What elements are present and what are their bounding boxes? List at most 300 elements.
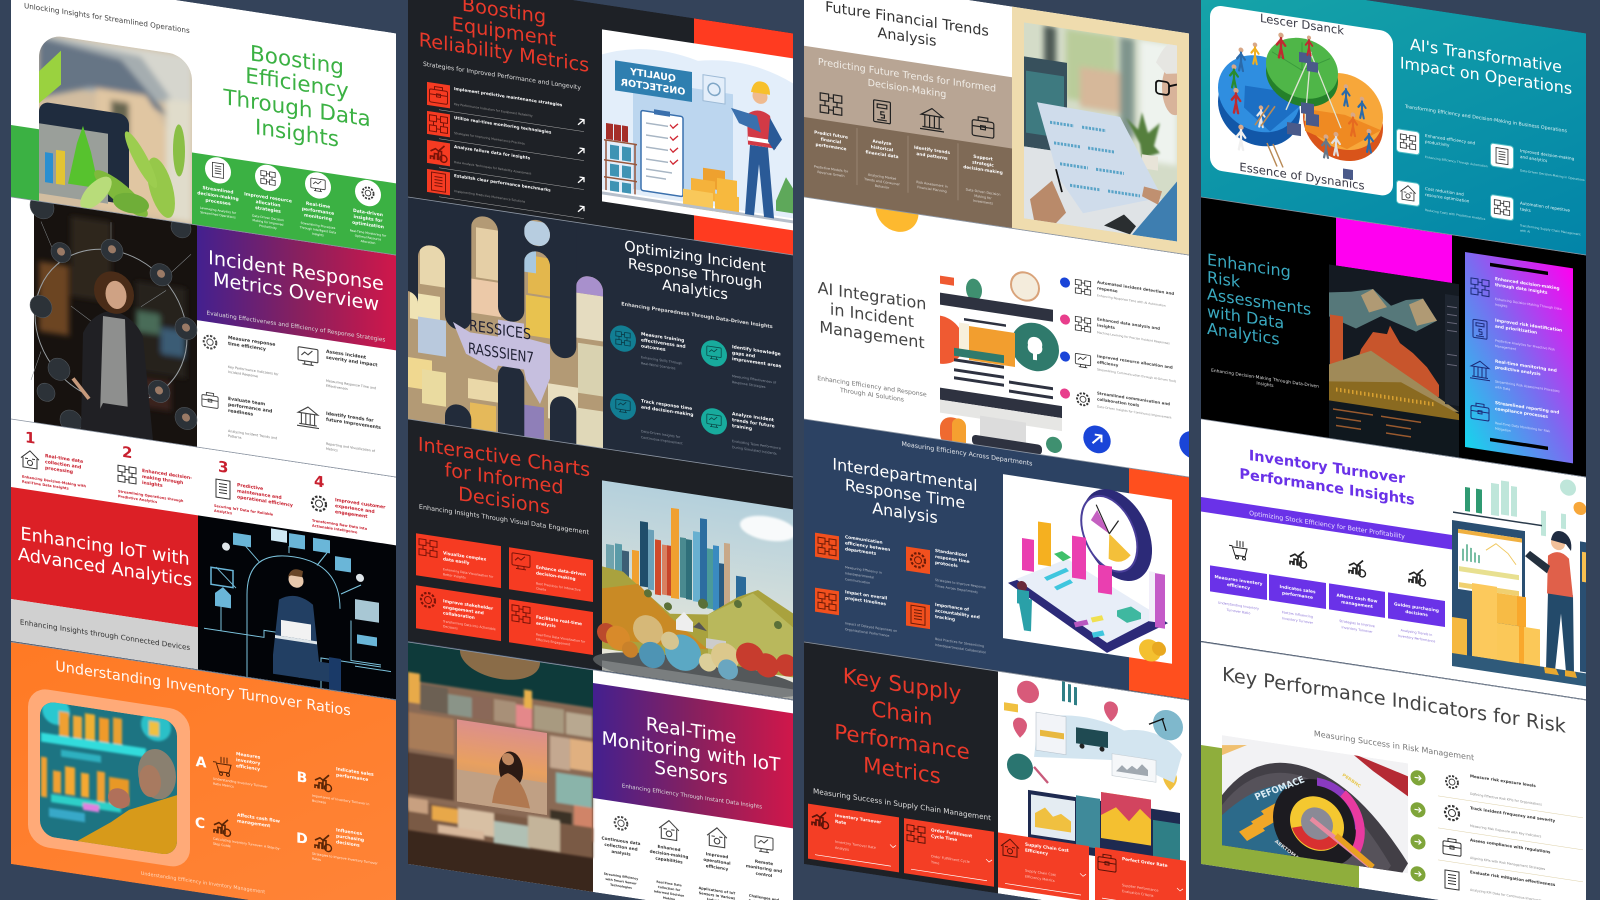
image caption top: Lescer Dsanck <box>1260 11 1344 38</box>
item: monitoring: Real-time monitoring and <box>1495 359 1557 374</box>
item: readiness: performance and <box>228 402 272 415</box>
item C: Step Guide <box>213 842 231 848</box>
item: timelines: project timelines <box>845 595 886 607</box>
item: risk identification: Predictive Analytics for Proactive Risk <box>1495 339 1555 352</box>
card: inventory turnover: Rate <box>835 819 846 826</box>
item: accountability: Importance of <box>935 602 969 613</box>
title <box>419 0 589 77</box>
item: automation: tasks <box>1520 206 1531 213</box>
title: Real-Time <box>646 714 736 749</box>
item: reporting: Mitigation <box>1495 427 1511 433</box>
item: readiness: readiness <box>228 408 253 418</box>
item: readiness <box>202 392 277 445</box>
title: with Data <box>1207 302 1284 333</box>
item: cash flow: management <box>1341 599 1373 610</box>
item: monitoring: with Data <box>1495 385 1510 391</box>
item: historical data <box>863 98 900 192</box>
item: communication: departments <box>845 546 877 557</box>
item: predictive maintenance: Key Performance Indicators for Equipment Reliability <box>454 102 533 118</box>
title: Response Through <box>628 255 762 293</box>
item: decision-making: Enhanced <box>658 844 680 852</box>
item: efficiency: productivity <box>1425 139 1450 148</box>
card: real-time <box>509 599 593 655</box>
item: response time: Continuous Improvement <box>641 435 683 446</box>
item: compliance <box>1410 828 1583 882</box>
item: frequency: Measuring Risk Exposure with Key Indicators <box>1470 824 1542 839</box>
sign with mirrored lettering <box>615 60 692 102</box>
item: purchasing: Guides purchasing <box>1394 601 1439 614</box>
item: data collection: collection and <box>604 842 638 852</box>
card: visualize data: Better Insights <box>443 572 466 580</box>
item: performance monitoring: performance <box>302 206 334 217</box>
item: trends: and patterns <box>916 151 948 162</box>
item: operational efficiency: Improved <box>706 851 728 860</box>
subtitle: Insights <box>1256 380 1274 389</box>
item: reporting: Real-Time Data Monitoring for Risk <box>1495 421 1550 433</box>
item: performance monitoring: monitoring <box>304 212 332 223</box>
item 1: real-time data: Real-Time Data Insights <box>22 480 69 491</box>
item: response time: time efficiency <box>228 341 266 353</box>
item: knowledge gaps: Response Strategies <box>732 380 766 389</box>
item: historical data: Analyzing Market <box>868 173 897 181</box>
item: predict performance: Revenue Growth <box>817 170 845 178</box>
subtitle band <box>1201 497 1452 550</box>
title: Chain <box>871 697 933 731</box>
subtitle: Enhancing Insights Through Visual Data Engagement <box>419 503 590 536</box>
item: resources: efficiency <box>1097 359 1119 368</box>
card: order fulfillment: Time <box>930 860 939 865</box>
subtitle: Through AI Solutions <box>839 387 904 404</box>
item: reporting: Streamlined reporting and <box>1495 400 1559 416</box>
item: timelines: Impact of Delayed Responses on <box>845 621 897 633</box>
card: real-time: analysis <box>536 620 556 629</box>
title: Incident Response <box>208 246 384 295</box>
item: predict performance: performance <box>816 142 847 152</box>
card: supply chain cost: Supply Chain Cost <box>1025 868 1057 877</box>
item: risk identification: Improved risk identification <box>1495 318 1562 334</box>
footer text: Understanding Efficiency in Inventory Management <box>141 871 265 896</box>
item: sales: Indicates sales <box>1279 584 1316 595</box>
subtitle: Predicting Future Trends for Informed <box>818 57 996 95</box>
title: Assessments <box>1207 284 1311 319</box>
item 4: customer experience: engagement <box>335 509 368 520</box>
item: monitoring <box>427 111 584 161</box>
item: remote monitoring: Remote <box>755 859 773 866</box>
title: Key Supply <box>843 664 962 707</box>
item D <box>297 828 378 864</box>
item: communication: Communication <box>845 534 883 546</box>
item: trends: future improvements <box>326 417 381 431</box>
item: historical data: Behavior <box>875 184 890 190</box>
item: exposure: Measure risk exposure levels <box>1470 773 1536 788</box>
item: streamlined decision-making: Streamlined <box>203 185 233 196</box>
panel: Key Performance Indicators <box>1201 642 1586 900</box>
panel: Enhancing Risk Assessments <box>1201 197 1586 477</box>
gradient panel <box>1465 252 1573 463</box>
item: automation: Transforming Supply Chain Management <box>1519 223 1581 237</box>
item: response time: Measure response <box>228 335 275 348</box>
item: compliance: Assess compliance with regulations <box>1470 837 1551 855</box>
title block <box>11 487 198 627</box>
item A: inventory <box>236 757 260 767</box>
item: predict performance <box>814 92 849 179</box>
image card: 3D pie with people <box>1210 3 1393 197</box>
item: training <box>610 324 686 372</box>
item: historical data: Analyze <box>873 138 892 147</box>
item: data collection <box>602 814 641 891</box>
panel: Understanding Inventory Turnover <box>11 642 396 900</box>
card: stakeholders: Transforming Data into Actionable <box>442 619 496 631</box>
item: decision-making: and analytics <box>1520 154 1547 163</box>
photo: collage of beach pictures <box>408 621 593 892</box>
title: Response Time <box>845 475 965 512</box>
subtitle: Enhancing Efficiency Through Instant Data Insights <box>622 783 762 811</box>
item A: Understanding Inventory Turnover <box>213 777 268 789</box>
item: detection: Enhancing Response Time with AI Automation <box>1097 293 1166 308</box>
title: Interdepartmental <box>832 454 978 495</box>
item: cash flow: Strategies to Improve <box>1339 619 1375 628</box>
item: mitigation: Evaluate risk mitigation effectiveness <box>1470 869 1556 887</box>
item: performance monitoring: Through Intelligent Data <box>299 225 336 235</box>
item: decision-making <box>650 818 688 900</box>
item C: Calculating Inventory Turnover: A Step-by- <box>213 837 281 851</box>
item: data-driven insights: optimization <box>352 220 384 230</box>
item: streamlined decision-making: decision-making <box>197 190 239 202</box>
item: strategic decisions <box>963 115 1003 207</box>
item: severity: Assess incident <box>326 349 367 361</box>
illustration: dashboard computer <box>940 260 1062 464</box>
title: Insights <box>255 115 339 153</box>
item D: D <box>296 830 308 848</box>
item: resource allocation <box>244 161 292 233</box>
item: risk identification: and prioritization <box>1495 324 1537 336</box>
card: stakeholders: Decisions <box>443 624 458 631</box>
item: monitoring: Streamlining Risk Assessment Processes <box>1495 380 1560 393</box>
green accent block <box>1201 745 1359 888</box>
title: for Informed <box>444 458 564 499</box>
item: trends: During Simulated Incidents <box>732 445 777 456</box>
image caption bottom: Essence of Dysnanics <box>1239 160 1365 193</box>
item: readiness: Analyzing Incident Trends and <box>228 429 277 440</box>
item: trends: Metrics <box>326 447 338 453</box>
item: knowledge gaps: Measuring Effectiveness of <box>732 374 777 385</box>
item: decision-making <box>1471 272 1562 317</box>
panel: Inventory Turnover Performance <box>1201 419 1586 699</box>
item: trends: trends for future <box>732 417 775 430</box>
item: resources: Streamlining Communication through AI-Driven Tools <box>1097 367 1177 383</box>
card: visualize data: Visualize complex <box>443 550 486 563</box>
item: accountability: accountability and <box>935 608 980 621</box>
item: operational efficiency <box>699 825 736 900</box>
title: Decisions <box>458 482 550 519</box>
item: efficiency <box>1396 129 1488 168</box>
card: visualize data: Enhancing Data Visualization for <box>443 567 494 579</box>
photo: house and dashboard <box>39 33 192 231</box>
item: decision-making: decision-making <box>650 849 688 859</box>
title <box>1239 446 1415 509</box>
item: decision-making: Informed Decision <box>654 889 684 898</box>
item: trends <box>296 406 381 452</box>
item: readiness: Evaluate team <box>228 396 265 408</box>
title <box>418 433 590 525</box>
item: performance monitoring: Real-time <box>306 201 330 210</box>
item 3: predictive maintenance: maintenance and <box>237 488 282 501</box>
item: response time <box>202 334 278 378</box>
item 2: decision-making: 2 <box>122 443 132 462</box>
item: resources <box>1060 348 1177 383</box>
item: data analysis: insights <box>1097 322 1116 330</box>
subtitle: Transforming Efficiency and Decision-Making in Business Operations <box>1404 104 1567 135</box>
photo: sticky notes wall behind pill cut-outs: RESSICES <box>469 316 531 344</box>
item D: Rates <box>312 857 321 862</box>
item: decision-making: Enhancing Decision-Making Through Data <box>1495 297 1562 311</box>
item: severity: Effectiveness <box>326 384 348 391</box>
kicker: Measuring Efficiency Across Departments <box>902 441 1032 468</box>
panel: Future Financial Trends <box>804 0 1189 255</box>
illustration: person with connected devices <box>198 515 396 699</box>
item 3: predictive maintenance: operational efficiency <box>237 494 293 509</box>
item 3: predictive maintenance: Predictive <box>237 482 263 492</box>
photo: sticky notes wall behind pill cut-outs <box>408 167 604 477</box>
card: order fulfillment: Order Fulfillment Cycle <box>931 854 970 864</box>
card: supply chain cost <box>998 832 1089 900</box>
item: historical data: Trends and Consumer <box>863 177 900 187</box>
card: supply chain cost: Supply Chain Cost <box>1025 842 1069 854</box>
item: cash flow: Inventory Turnover <box>1342 625 1373 634</box>
item D: Strategies to Improve Inventory Turnover <box>312 852 378 866</box>
item: data analysis: Enhanced data analysis and <box>1097 316 1160 331</box>
subtitle band: Optimizing Stock Efficiency for Better Profitability <box>1249 510 1405 541</box>
panel: Boosting Equipment Reliability <box>408 0 793 255</box>
subtitle: Enhancing Preparedness Through Data-Driven Insights <box>621 301 773 330</box>
title block: Advanced Analytics <box>18 544 192 591</box>
item: data collection: Streaming Efficiency <box>604 872 638 881</box>
item: streamlined decision-making: Streamlined Operations <box>200 210 236 220</box>
item: operational efficiency: efficiency <box>706 863 728 872</box>
image: terrain and data dashboard <box>1329 264 1459 458</box>
item A: Ratio Metrics <box>213 782 234 789</box>
item: response time: and decision-making <box>641 404 693 418</box>
title block: Enhancing IoT with <box>20 524 190 570</box>
item: purchasing: Inventory Performance <box>1398 634 1435 643</box>
item: operational efficiency: Applications of IoT <box>699 886 736 896</box>
title: Future Financial Trends <box>825 0 989 40</box>
item 2: decision-making <box>118 446 192 504</box>
card: stakeholders: Improve stakeholder <box>443 598 494 612</box>
item B: Importance of Inventory Turnover in <box>312 794 369 806</box>
illustration: woman with boxes and clipboard <box>1452 462 1586 686</box>
image: performance gauge: PEFOMACE <box>1253 775 1307 803</box>
item: trends: Reporting and Visualization of <box>326 442 376 453</box>
title: Analysis <box>878 25 936 50</box>
card: real-time: Facilitate real-time <box>536 614 582 627</box>
item: strategic decisions: Investments <box>973 199 993 206</box>
title: Monitoring with IoT <box>602 728 781 776</box>
subtitle: Measuring Success in Supply Chain Management <box>813 786 991 822</box>
item: data analysis <box>1060 311 1170 345</box>
subtitle: Strategies for Improved Performance and Longevity <box>423 61 581 92</box>
item: purchasing: decisions <box>1405 609 1428 618</box>
title: Reliability Metrics <box>419 28 589 77</box>
item: predictive maintenance: Implement predictive maintenance strategies <box>454 86 563 107</box>
item D: Influences <box>336 827 362 837</box>
item: accountability: Best Practices for Streamlining <box>935 637 984 648</box>
subtitle: Enhancing Decision-Making Through Data-Driven <box>1211 368 1319 390</box>
item: cost reduction: resource optimization <box>1425 192 1470 204</box>
item 4: customer experience: Transforming Raw Data into <box>312 519 368 531</box>
item: trends: Identify trends <box>914 145 950 156</box>
item: decision-making <box>1490 143 1585 182</box>
title: Performance <box>834 720 970 765</box>
title: Sensors <box>654 757 728 789</box>
item: cost reduction: Reducing Costs with Predictive Analytics <box>1425 208 1486 221</box>
card: decision-making <box>509 547 593 602</box>
sign with mirrored lettering: QUALITY <box>630 67 676 85</box>
item C: management <box>237 818 271 829</box>
item: protocols <box>906 543 986 596</box>
item: remote monitoring: monitoring and <box>746 863 782 874</box>
item: trends: training <box>732 423 752 432</box>
item D: decisions <box>336 839 360 849</box>
item: monitoring: predictive analysis <box>1495 365 1541 377</box>
subtitle block <box>11 599 198 669</box>
item: severity: Measuring Response Time and <box>326 379 376 390</box>
item: sales: performance <box>1282 590 1313 601</box>
item: failure data <box>427 140 584 190</box>
item: risk identification <box>1473 314 1562 358</box>
item: severity: severity and impact <box>326 355 378 369</box>
title: Understanding Inventory Turnover Ratios <box>55 659 351 719</box>
item: protocols: protocols <box>935 560 958 569</box>
title: AI's Transformative <box>1410 35 1562 77</box>
item: strategic decisions: Making for <box>974 194 992 201</box>
item A: A <box>196 754 207 772</box>
item: response time: Key Performance Indicators for <box>228 365 279 377</box>
item: training: effectiveness and <box>641 337 686 350</box>
item: decision-making: Enhanced decision-making <box>1495 276 1560 292</box>
item 1: real-time data: collection and <box>45 459 81 471</box>
item: efficiency <box>1210 536 1267 618</box>
item: training: Measure training <box>641 331 684 344</box>
item: performance monitoring: Streamlining Processes <box>301 221 336 230</box>
card: order fulfillment: Order Fulfillment <box>931 827 972 839</box>
title: Equipment <box>452 12 557 51</box>
item: trends: Identify trends for <box>326 411 374 424</box>
item: benchmarks: Implementing Predictive Maintenance Solutions <box>454 189 526 204</box>
image: performance gauge <box>1222 733 1408 883</box>
item 1: real-time data <box>20 432 86 490</box>
item: strategic decisions: Data-Driven Decision <box>966 187 1000 197</box>
item: detection <box>1060 274 1174 309</box>
item 2: decision-making: Predictive Analytics <box>118 494 157 504</box>
card: supply chain cost: Efficiency <box>1025 848 1048 857</box>
header band <box>197 225 396 350</box>
item: resource allocation: Productivity <box>259 224 277 230</box>
item B: performance <box>336 772 368 783</box>
item: failure data: Analyze failure data for insights <box>454 144 531 161</box>
title: Analytics <box>662 277 728 303</box>
item 2: decision-making: Enhanced decision- <box>142 468 192 481</box>
item: communication <box>1060 385 1172 420</box>
item 2: decision-making: insights <box>142 480 163 489</box>
card: decision-making: Charts <box>536 586 546 592</box>
item: purchasing <box>1388 564 1445 645</box>
photo frame <box>28 687 190 869</box>
item A: efficiency <box>236 763 260 773</box>
item: decision-making: through data insights <box>1495 282 1548 296</box>
item: operational efficiency: operational <box>703 857 731 866</box>
item: cash flow: Affects cash flow <box>1337 593 1377 605</box>
item: efficiency: efficiency <box>1227 582 1250 591</box>
item: streamlined decision-making: processes <box>205 197 231 207</box>
photo: sticky notes wall behind pill cut-outs: RASSSIEN7 <box>468 339 534 367</box>
item: resource allocation: Improved resource <box>244 191 292 205</box>
item: strategic decisions: decision-making <box>963 164 1003 176</box>
item: streamlined decision-making <box>197 154 239 220</box>
panel: Key Supply Chain <box>804 642 1189 900</box>
item: decision-making: Real-Time Data <box>656 880 682 887</box>
item: performance monitoring <box>300 172 336 236</box>
item: trends <box>701 406 781 456</box>
item B: B <box>297 769 307 787</box>
item: efficiency: Turnover Ratio <box>1226 608 1250 615</box>
title <box>1207 250 1311 354</box>
item: response time: Track response time <box>641 398 692 412</box>
item: accountability: tracking <box>935 614 955 623</box>
item: training: Real-World Scenarios <box>641 361 676 371</box>
title <box>832 454 978 533</box>
illustration: quality inspector <box>602 29 793 230</box>
item: decision-making: Collection for <box>658 885 681 892</box>
item 3: predictive maintenance: 3 <box>218 457 228 477</box>
item: efficiency: Understanding Inventory <box>1218 601 1259 611</box>
item D: purchasing <box>336 833 364 843</box>
item: predict performance: Predict future <box>814 130 848 141</box>
card: perfect order: Perfect Order Rate <box>1122 856 1168 869</box>
card: order fulfillment: Cycle Time <box>931 833 957 843</box>
item: predict performance: Predictive Models for <box>814 165 849 174</box>
panel: Boosting Efficiency <box>11 0 396 262</box>
item: readiness: Patterns <box>228 434 242 440</box>
item: cost reduction <box>1396 180 1486 221</box>
item 4: customer experience: Actionable Intelligence <box>312 524 358 535</box>
card: stakeholders: collaboration <box>443 610 475 621</box>
title: Optimizing Incident <box>624 238 766 276</box>
panel: Enhancing IoT <box>11 419 396 699</box>
item: compliance: Aligning KPIs with Risk Management Strategies <box>1470 856 1546 871</box>
card: perfect order: Evaluation Criteria <box>1122 889 1153 898</box>
item: remote monitoring: control <box>756 871 773 878</box>
subtitle block: Enhancing Insights through Connected Devices <box>20 617 190 652</box>
item 3: predictive maintenance: Analytics <box>214 509 232 515</box>
title <box>818 278 926 353</box>
item 1: real-time data: 1 <box>25 428 35 448</box>
button: next arrow <box>1083 424 1111 455</box>
item: data-driven insights: Optimal Resource <box>355 234 381 242</box>
item: decision-making: Improved decision-making <box>1520 148 1575 161</box>
item: training: Enhancing Skills Through <box>641 355 682 366</box>
panel: Incident Response Metrics <box>11 190 396 481</box>
title: Analysis <box>872 498 938 527</box>
item: strategic decisions: Support <box>973 154 993 163</box>
item 4: customer experience: experience and <box>335 503 375 515</box>
item: sales: Factors Influencing <box>1282 610 1313 619</box>
item: failure data: Data Analysis Techniques for Reliability Assessment <box>454 160 532 176</box>
item: accountability <box>906 597 986 655</box>
card: inventory turnover: Inventory Turnover <box>835 813 882 826</box>
item: protocols: response time <box>935 554 970 565</box>
decorative yellow circle <box>876 185 918 235</box>
